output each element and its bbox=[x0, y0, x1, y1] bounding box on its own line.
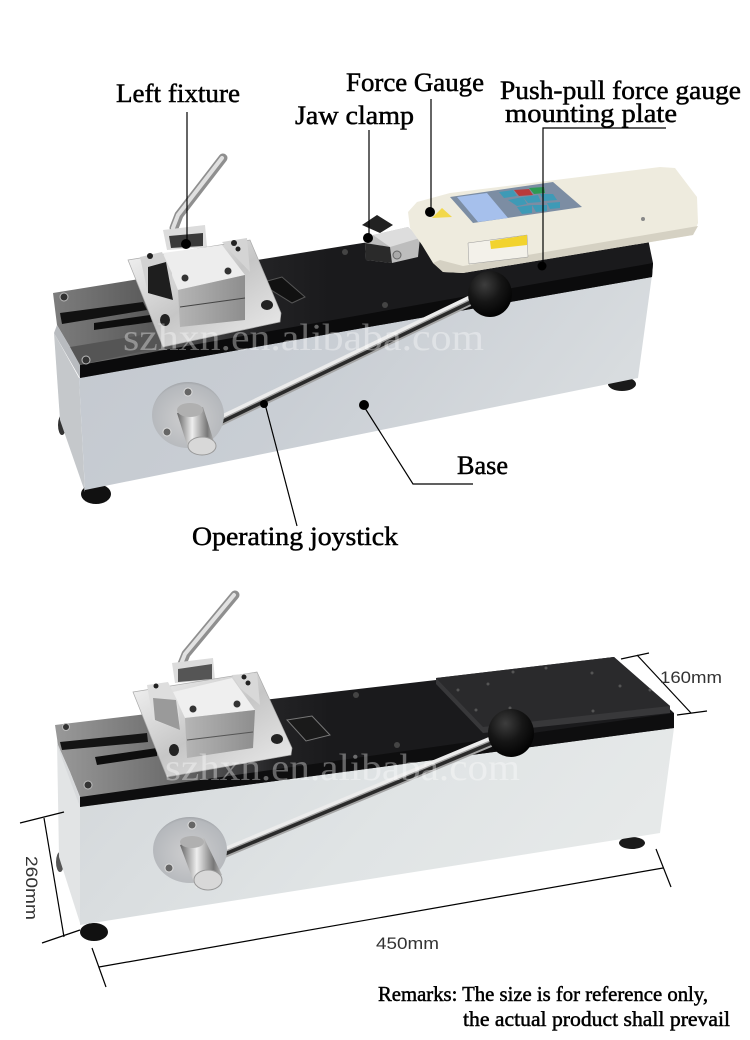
foot left rear bbox=[58, 415, 66, 435]
mounting plate bbox=[436, 657, 670, 733]
dimension: 450mm bbox=[92, 849, 671, 987]
dimension: 260mm bbox=[20, 812, 80, 943]
watermark: szhxn.en.alibaba.com bbox=[123, 317, 484, 359]
label: Push-pull force gauge: Push-pull force gauge bbox=[500, 75, 741, 105]
dimension: 160mm bbox=[621, 653, 722, 715]
label: Operating joystick: Operating joystick bbox=[192, 521, 399, 551]
label: Base: Base bbox=[457, 450, 508, 480]
base plate bbox=[53, 200, 653, 378]
label: mounting plate: mounting plate bbox=[505, 98, 677, 128]
watermark: szhxn.en.alibaba.com bbox=[165, 747, 520, 789]
keypad panel bbox=[450, 182, 582, 223]
force gauge bbox=[408, 167, 698, 273]
machine: bottom dimension view bbox=[55, 595, 674, 941]
remarks note: the actual product shall prevail bbox=[463, 1007, 730, 1031]
warning sticker bbox=[468, 235, 528, 264]
dimension: 160mm: 160mm bbox=[660, 669, 722, 687]
operating joystick bbox=[152, 271, 512, 455]
foot front bbox=[80, 923, 108, 941]
jaw clamp bbox=[362, 215, 420, 263]
dimension: 450mm: 450mm bbox=[376, 935, 439, 953]
remarks note: Remarks: The size is for reference only, bbox=[378, 982, 708, 1006]
label: Left fixture: Left fixture bbox=[116, 78, 240, 108]
foot back bbox=[608, 377, 636, 391]
front face bbox=[80, 728, 674, 925]
foot back bbox=[619, 837, 645, 849]
left fixture bbox=[133, 595, 292, 777]
left fixture bbox=[128, 158, 281, 347]
label: Jaw clamp: Jaw clamp bbox=[295, 100, 414, 130]
remarks note bbox=[378, 982, 730, 1031]
callout lines and dots bbox=[181, 99, 666, 526]
side face bbox=[57, 740, 80, 923]
base plate bbox=[55, 657, 674, 807]
operating joystick bbox=[153, 709, 534, 890]
label: Force Gauge: Force Gauge bbox=[346, 67, 484, 97]
foot front bbox=[81, 484, 111, 504]
side face bbox=[54, 333, 85, 492]
front face bbox=[79, 275, 652, 490]
dimension: 260mm: 260mm bbox=[22, 856, 40, 920]
machine: top labelled view bbox=[53, 158, 698, 504]
foot left rear bbox=[56, 852, 64, 872]
